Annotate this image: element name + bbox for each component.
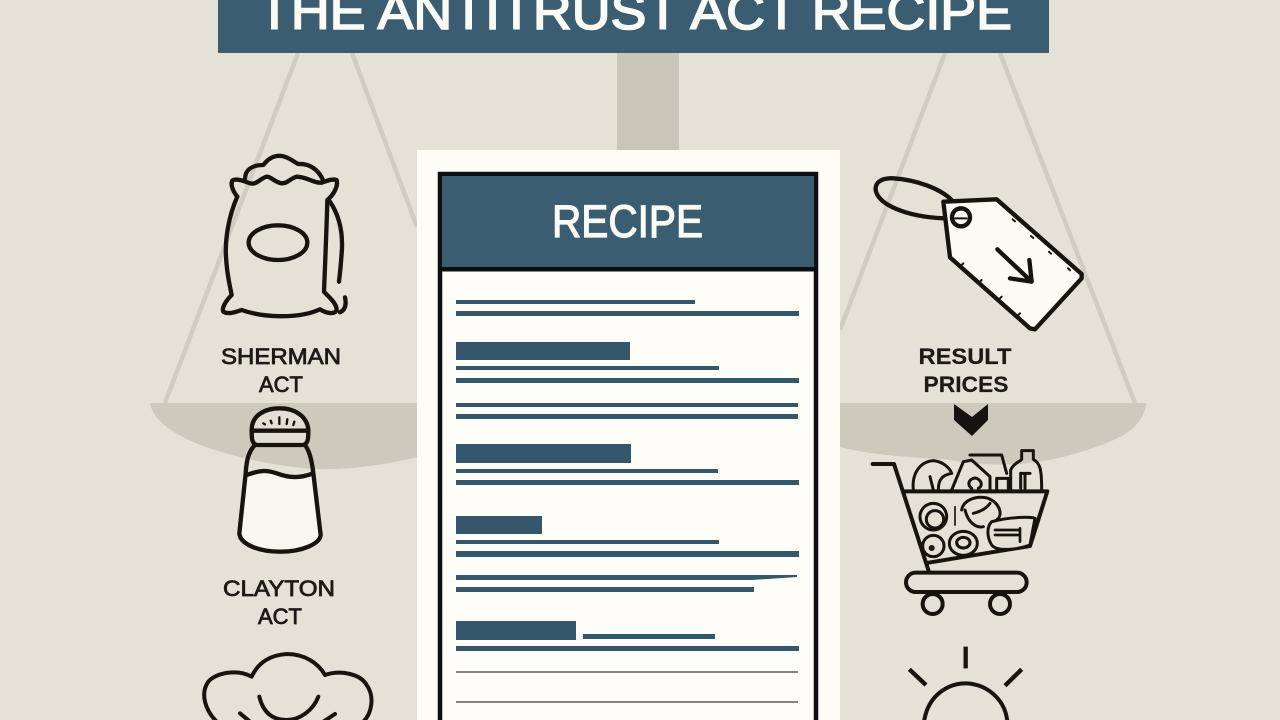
left scale pan [150, 403, 417, 469]
recipe heading: RECIPE [552, 196, 703, 247]
icon: light bulb [909, 647, 1022, 720]
icon: shopping cart [873, 451, 1047, 614]
icon: price tag [876, 178, 1082, 329]
label: Sherman Act: ACT [259, 372, 303, 397]
recipe card border [440, 174, 816, 720]
recipe header [440, 176, 816, 272]
left scale ropes [165, 53, 417, 403]
icon: down chevron arrow [954, 404, 988, 436]
label: Sherman Act: SHERMAN [221, 344, 341, 369]
panel: recipe card [417, 150, 840, 720]
icon: flour sack [223, 156, 346, 316]
right scale pan [840, 403, 1146, 465]
icon: chef hat [204, 654, 371, 720]
label: Result Prices: RESULT [918, 344, 1012, 369]
label: Clayton Act: ACT [258, 604, 302, 629]
label: Result Prices: PRICES [924, 372, 1008, 397]
recipe text lines [456, 300, 799, 703]
right scale ropes [840, 53, 1135, 403]
scale post [617, 53, 679, 153]
title banner [218, 0, 1049, 53]
icon: salt shaker [239, 408, 321, 552]
scale backdrop [150, 53, 1146, 469]
label: Clayton Act: CLAYTON [223, 576, 335, 601]
